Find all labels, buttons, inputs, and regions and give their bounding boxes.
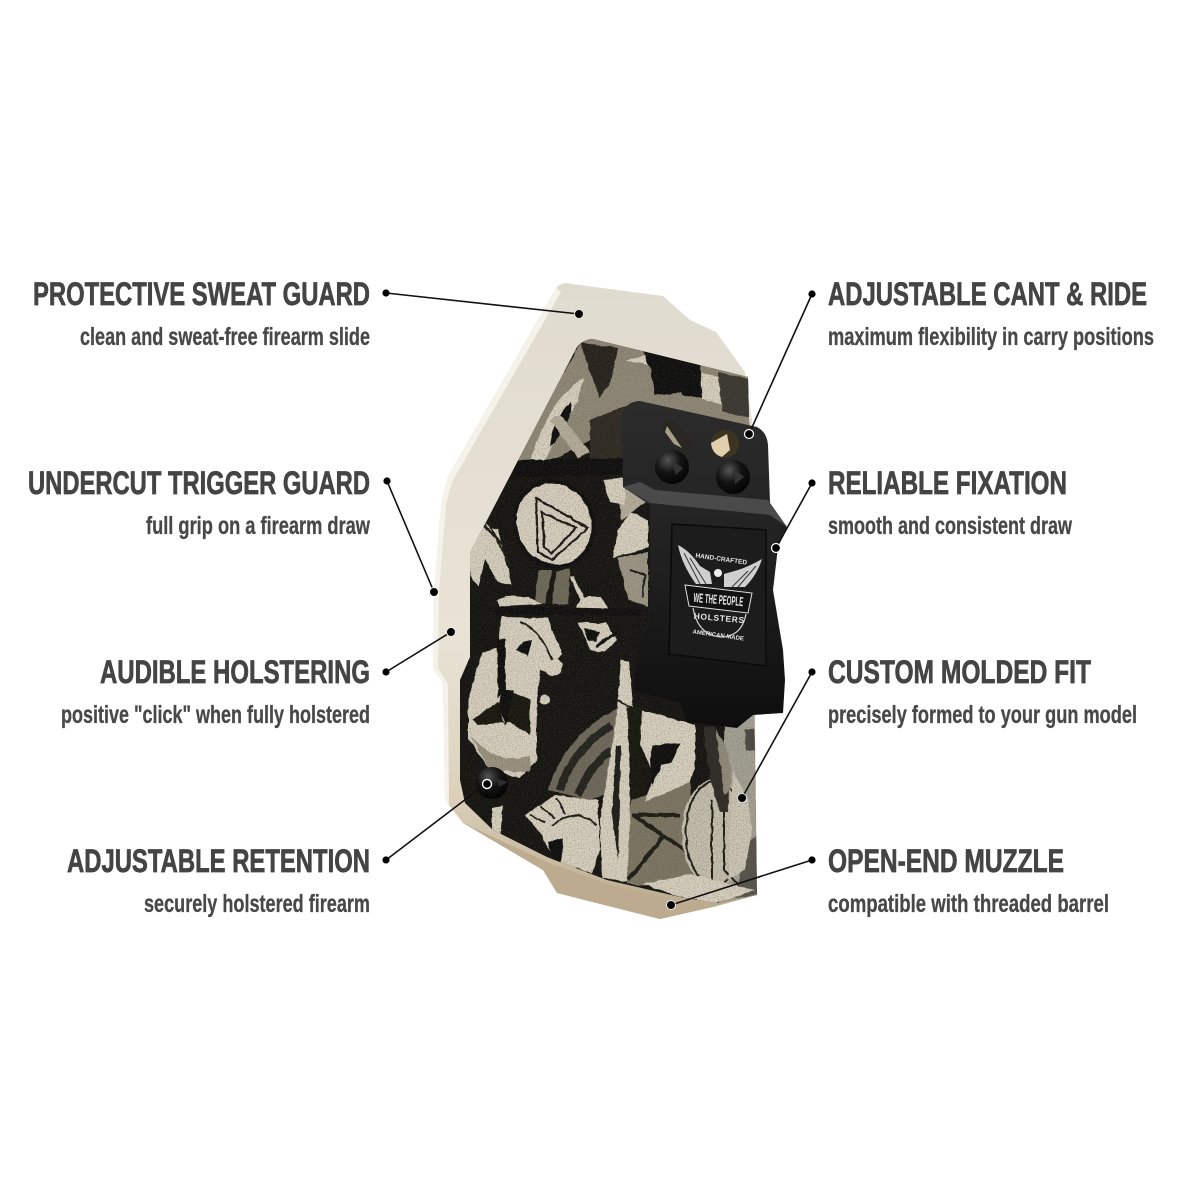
star panel (627, 780, 695, 890)
label: adjustable retention: securely holstered firearm (144, 890, 370, 918)
logo ring (693, 608, 746, 637)
adjustment hole right (711, 430, 739, 458)
label: audible holstering: positive "click" when fully holstered (61, 701, 370, 729)
shell shaded bottom lip (463, 823, 717, 919)
right shield (682, 780, 734, 884)
leader: reliable fixation (772, 479, 816, 552)
leader: audible holstering (382, 628, 456, 676)
we the people holsters logo: WE THE PEOPLE (693, 590, 744, 609)
spartan shield (512, 480, 596, 569)
shell light rim (433, 288, 561, 806)
gray arc behind sword (548, 708, 618, 800)
label: audible holstering (61, 654, 370, 729)
black belt clip (622, 401, 787, 728)
holster product illustration (433, 283, 787, 919)
label: protective sweat guard: PROTECTIVE SWEAT GUARD (33, 276, 370, 312)
center small icon (577, 622, 617, 652)
leader: protective sweat guard (382, 289, 584, 318)
leader: custom molded fit (738, 668, 816, 802)
retention screw (476, 767, 508, 799)
label: custom molded fit (828, 654, 1137, 729)
label: undercut trigger guard: full grip on a firearm draw (146, 512, 370, 540)
upper mottled area (518, 339, 750, 460)
helmet dome under shield (570, 576, 609, 610)
label: adjustable retention: ADJUSTABLE RETENTION (67, 843, 370, 879)
leader: adjustable retention (382, 780, 492, 864)
right helmet (613, 512, 648, 558)
right gray area (718, 714, 757, 902)
leader: open-end muzzle (666, 856, 816, 910)
adjustment slot left (662, 420, 694, 452)
leader: undercut trigger guard (383, 477, 438, 596)
logo wing feather lines (684, 553, 756, 587)
bottom spearhead (642, 874, 755, 903)
sword (530, 378, 584, 465)
logo bottom text: AMERICAN MADE (692, 629, 744, 643)
label: open-end muzzle: compatible with threaded barrel (828, 890, 1109, 918)
left helmet (470, 522, 512, 587)
plume arc (497, 596, 542, 606)
long sword (600, 660, 633, 882)
dark horizontal band (512, 458, 628, 478)
logo holsters text: HOLSTERS (693, 611, 745, 625)
label: undercut trigger guard (28, 465, 370, 540)
label: adjustable cant and ride (828, 276, 1154, 351)
light right blade (728, 770, 752, 880)
we the people holsters logo (678, 545, 762, 643)
callout leader lines with dots (382, 289, 816, 909)
leader: adjustable cant and ride (744, 290, 816, 438)
clip body (622, 401, 787, 728)
label: custom molded fit: CUSTOM MOLDED FIT (828, 654, 1091, 690)
lower helmet (525, 795, 600, 873)
label: open-end muzzle (828, 843, 1109, 918)
label: reliable fixation: smooth and consistent draw (828, 512, 1072, 540)
label: reliable fixation (828, 465, 1072, 540)
panel base (455, 335, 760, 910)
camouflage wrap panel with spartan pattern (455, 335, 760, 910)
label: undercut trigger guard: UNDERCUT TRIGGER GUARD (28, 465, 370, 501)
mid helmet with bulb (468, 617, 562, 778)
feather top (580, 342, 618, 398)
clip screw right (716, 460, 750, 494)
label: open-end muzzle: OPEN-END MUZZLE (828, 843, 1064, 879)
logo top text: HAND-CRAFTED (695, 552, 748, 567)
clip logo plate (669, 524, 766, 666)
lower right helmet (640, 710, 695, 802)
light grain overlay (455, 335, 760, 910)
logo wing left (678, 545, 712, 584)
logo wing right (724, 559, 762, 587)
dark strip beside sword (626, 707, 633, 775)
gray columns under shield (535, 570, 552, 603)
label: protective sweat guard (33, 276, 370, 351)
logo eagle head (714, 568, 722, 578)
dark grain overlay (455, 335, 760, 910)
holster outer shell (433, 283, 757, 919)
clip screw left (655, 450, 689, 484)
label: reliable fixation: RELIABLE FIXATION (828, 465, 1067, 501)
label: audible holstering: AUDIBLE HOLSTERING (100, 654, 370, 690)
clip fold highlight (623, 482, 787, 527)
label: adjustable retention (67, 843, 370, 918)
feather (704, 727, 729, 812)
lower left plume (492, 806, 503, 838)
logo banner (685, 585, 752, 613)
label: protective sweat guard: clean and sweat-free firearm slide (80, 323, 370, 351)
